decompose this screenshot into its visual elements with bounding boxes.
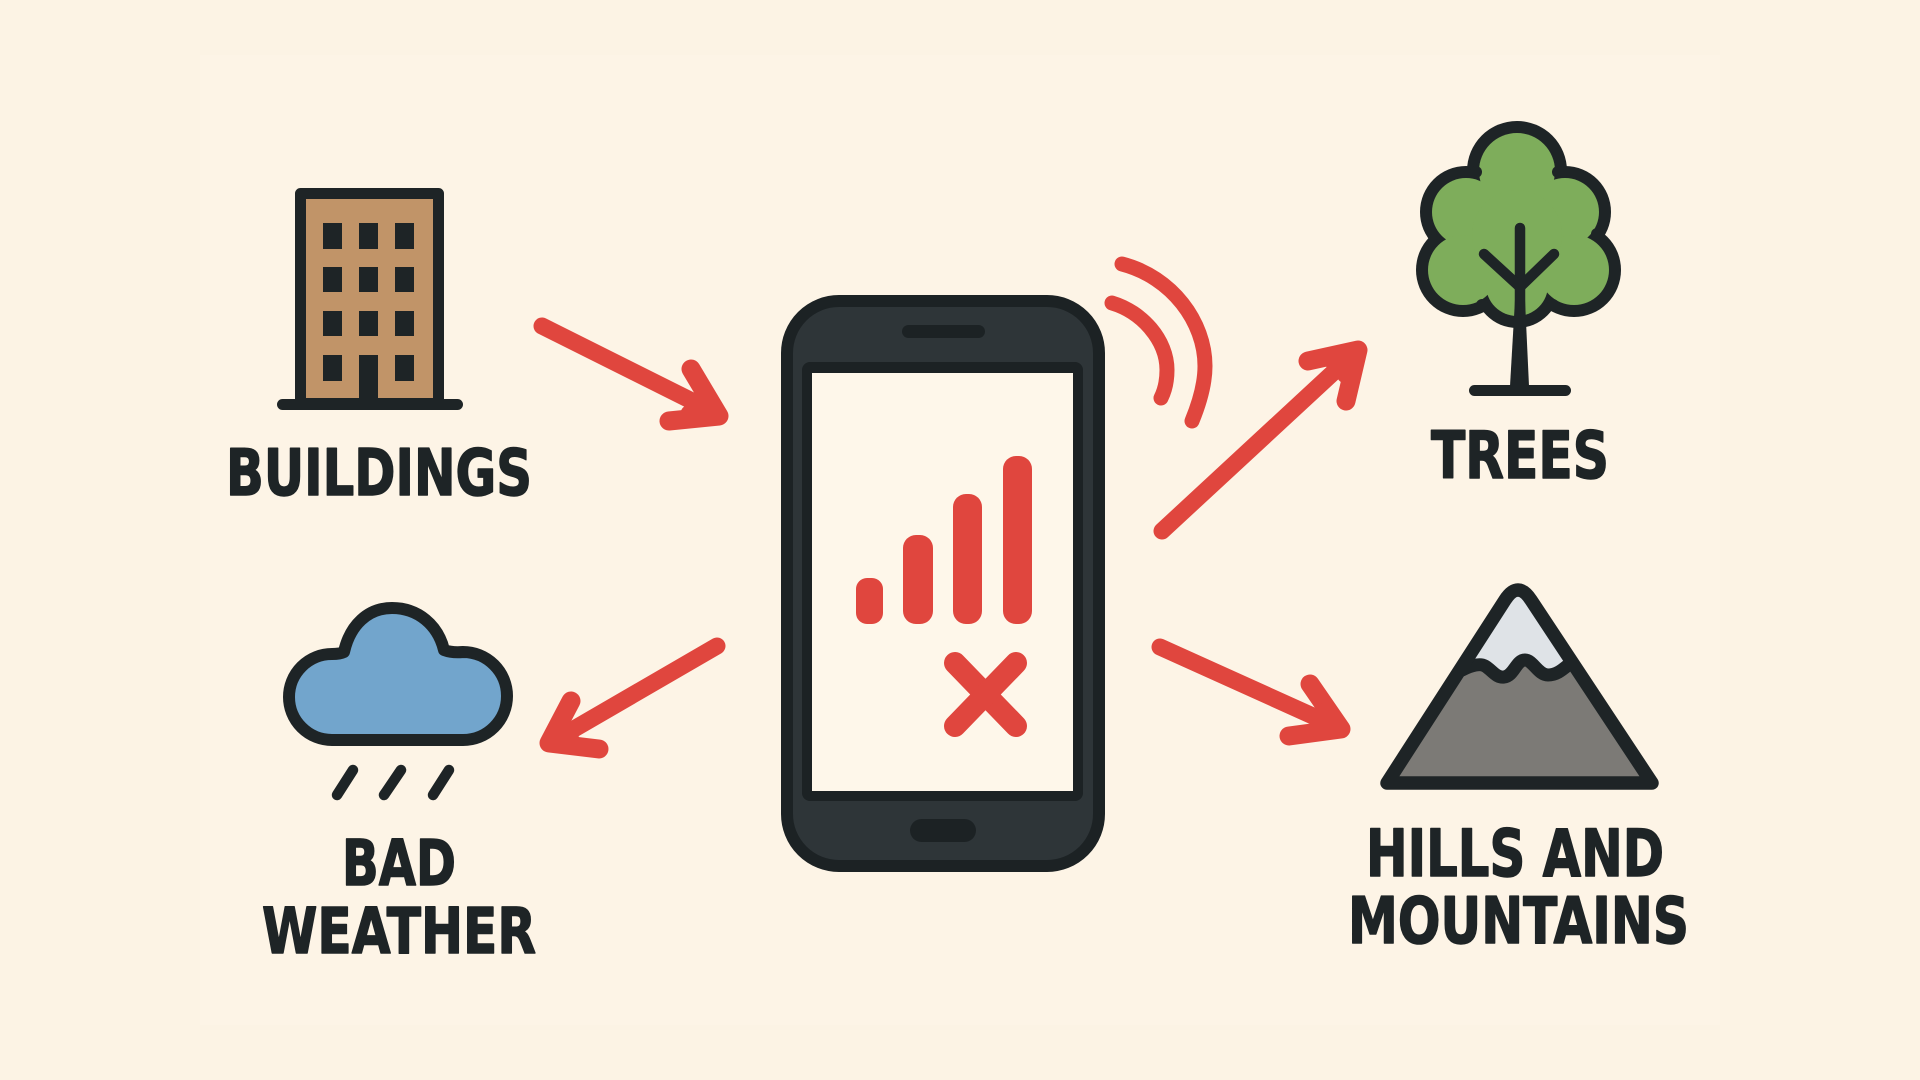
signal bars	[856, 456, 1032, 624]
icon: broken signal waves	[1112, 264, 1205, 421]
label: hills and mountains: MOUNTAINS	[1348, 885, 1689, 959]
icon: rain cloud	[289, 608, 507, 795]
speaker	[902, 325, 985, 338]
arrow: buildings to phone	[542, 326, 719, 421]
no-signal cross	[955, 663, 1016, 726]
screen	[812, 373, 1073, 791]
home button	[910, 819, 976, 842]
label: buildings: BUILDINGS	[226, 437, 532, 511]
label: hills and mountains: HILLS AND	[1366, 817, 1664, 892]
icon: smartphone	[787, 301, 1099, 866]
label: bad weather: BAD	[342, 827, 456, 900]
raindrops	[337, 770, 449, 795]
arrow: phone to bad weather	[549, 646, 717, 749]
icon: tree	[1416, 121, 1621, 396]
arrow: phone to hills and mountains	[1160, 647, 1341, 736]
label: hills and mountains	[1348, 817, 1689, 959]
icon: snow-capped mountain	[1387, 590, 1652, 783]
arrow: phone to trees	[1162, 350, 1358, 531]
icon: building	[277, 194, 463, 410]
label: trees: TREES	[1431, 419, 1609, 494]
screen bezel	[802, 362, 1083, 801]
label: bad weather: WEATHER	[262, 895, 536, 968]
label: bad weather	[262, 827, 536, 968]
